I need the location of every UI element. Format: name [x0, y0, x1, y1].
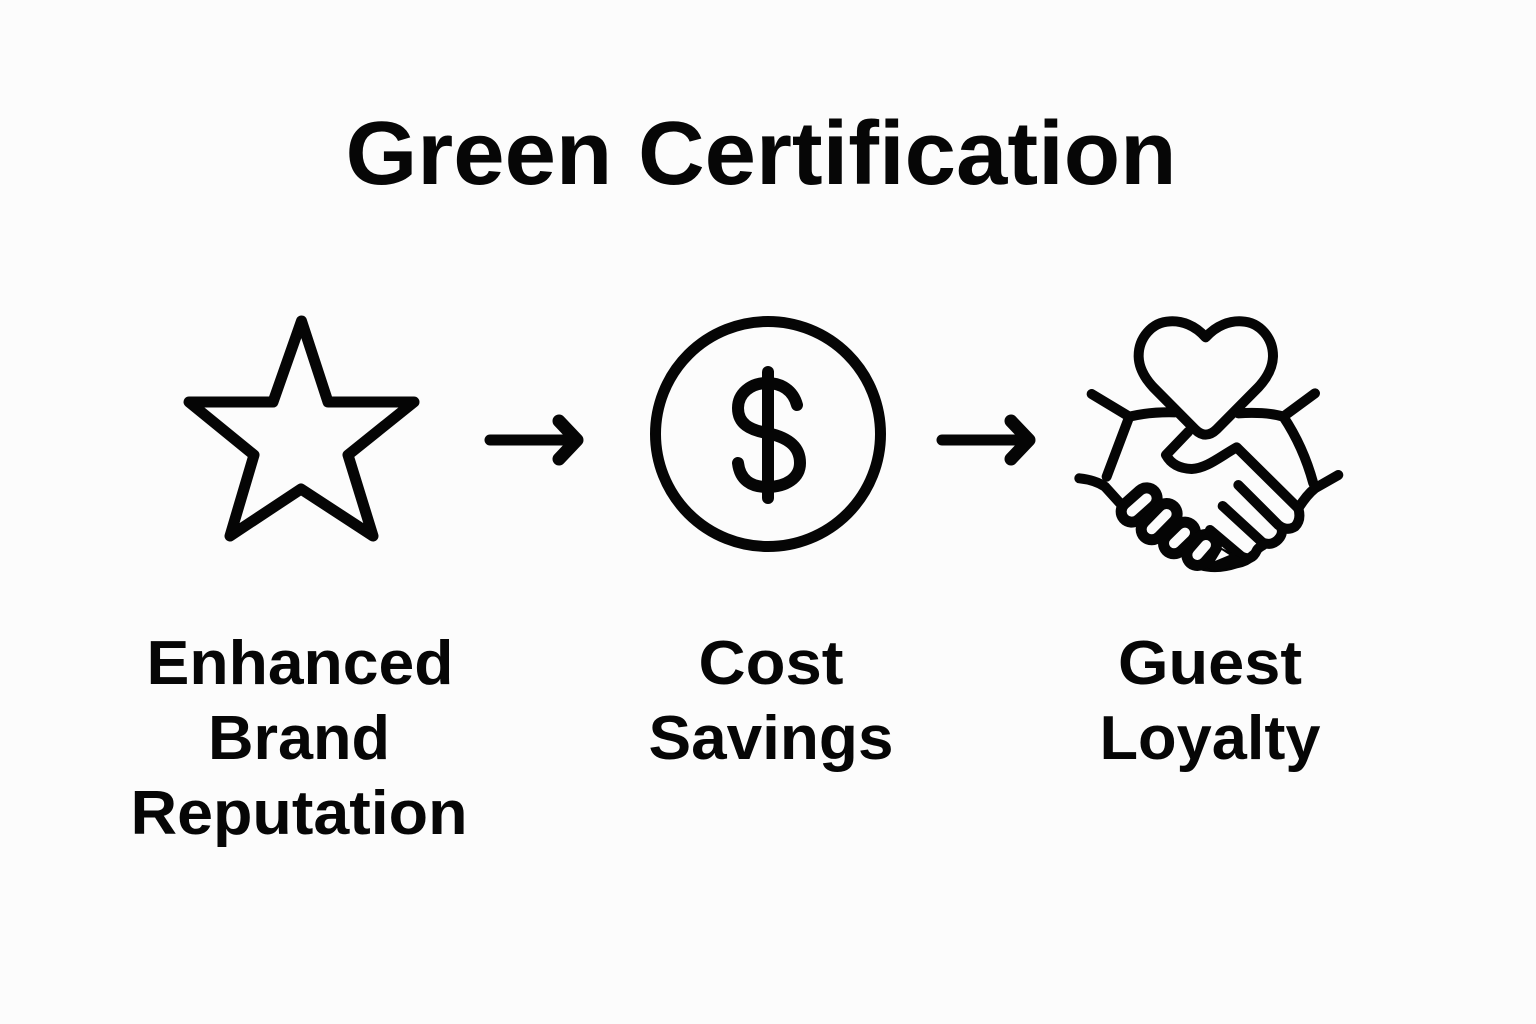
label: Cost Savings: Cost — [698, 629, 844, 698]
arrow: dollar to handshake — [942, 421, 1029, 459]
label: Enhanced Brand Reputation: Enhanced — [146, 629, 453, 698]
label: Guest Loyalty: Guest — [1118, 629, 1302, 698]
label: Cost Savings: Savings — [648, 704, 894, 773]
icon: star — [189, 321, 414, 536]
label: Guest Loyalty: Loyalty — [1100, 704, 1321, 773]
label: Cost Savings — [648, 629, 894, 773]
label: Enhanced Brand Reputation: Brand — [208, 704, 390, 773]
icon: dollar coin — [656, 322, 880, 546]
icon: handshake with heart — [1079, 321, 1338, 572]
label: Guest Loyalty — [1100, 629, 1321, 773]
arrow: star to dollar — [490, 421, 577, 459]
label: Enhanced Brand Reputation: Reputation — [130, 779, 468, 848]
label: Enhanced Brand Reputation — [130, 629, 468, 848]
title: Green Certification — [346, 104, 1176, 204]
